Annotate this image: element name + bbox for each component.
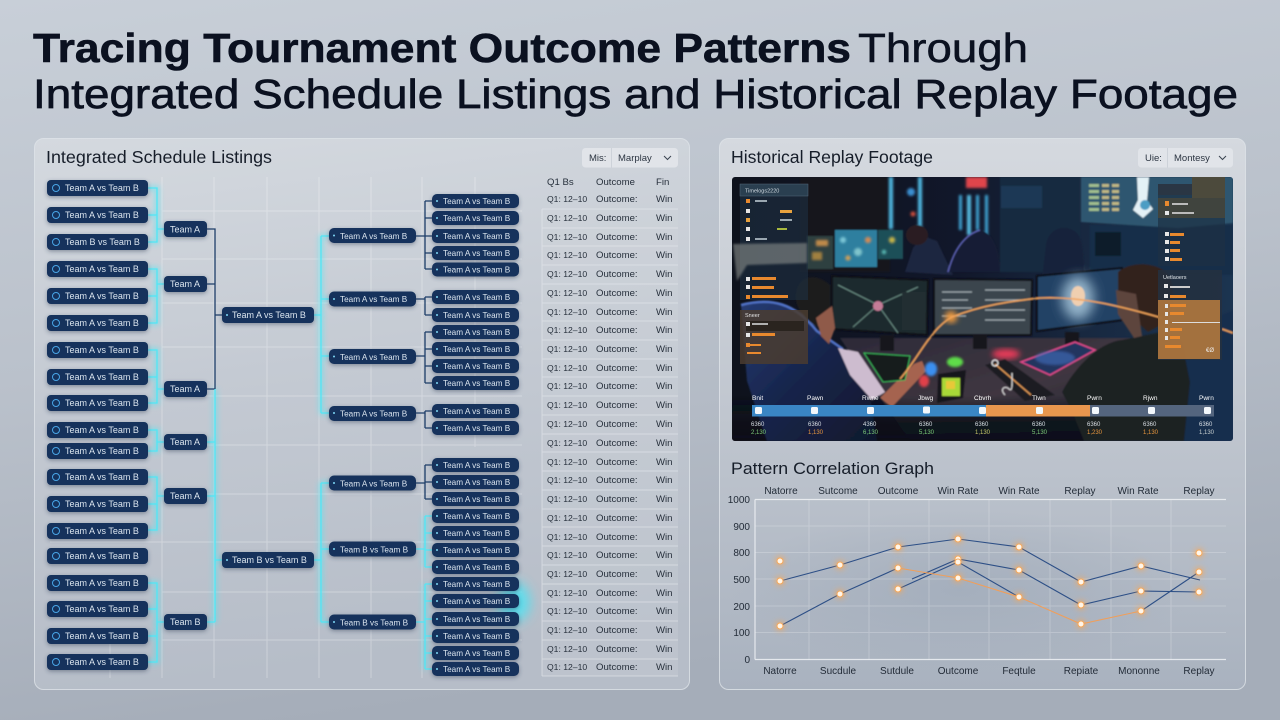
results table: Win [656,344,673,355]
bracket round 1: match list: Team A vs Team B [65,264,139,274]
results table: Outcome: [596,194,638,205]
replay timeline: 4360 [863,422,877,428]
replay timeline: Bnit [752,395,763,402]
main monitors [832,268,1122,352]
bracket round 5: match list: Team A vs Team B [443,362,511,371]
bracket round 3: semifinal matches [222,307,314,568]
results table: Q1: 12–10 [547,644,587,654]
results table: Outcome: [596,325,638,336]
results table: Win [656,381,673,392]
results table: Q1: 12–10 [547,625,587,635]
bracket round 1: match list: Team A vs Team B [65,318,139,328]
bracket round 4: quarterfinal matches: Team A vs Team B [340,232,408,241]
results table: Win [656,457,673,468]
results table: Win [656,400,673,411]
background people and chairs [905,225,1121,280]
replay timeline: 5,130 [1032,430,1048,436]
bracket round 1: match list: Team A vs Team B [65,291,139,301]
results table: Outcome: [596,250,638,261]
results table: Q1: 12–10 [547,475,587,485]
bracket round 5: match list: Team A vs Team B [443,615,511,624]
results table: Outcome: [596,381,638,392]
bracket round 4: quarterfinal matches: Team A vs Team B [340,410,408,418]
bracket round 5: match list: Team A vs Team B [443,495,511,504]
replay timeline: Pawn [807,395,824,402]
results table: Win [656,588,673,599]
replay timeline: 1,130 [808,430,824,436]
desk [840,337,1130,418]
bracket round 3: semifinal matches: Team B vs Team B [232,555,307,565]
orange trajectory lines [900,298,1233,395]
screen reflection strip [733,243,807,281]
dropdown control: Montesy [1174,153,1210,164]
results table: Win [656,606,673,617]
replay timeline: Tlwn [1032,395,1046,402]
background room [800,177,1156,272]
bracket round 5: match list: Team A vs Team B [443,345,511,354]
top axis labels [764,486,1215,497]
results table: Q1: 12–10 [547,194,587,204]
results table: Q1: 12–10 [547,438,587,448]
overlay panel lower left: Sneer [745,313,760,319]
highlight glow [498,582,530,622]
bracket round 5: match list: Team A vs Team B [443,266,511,274]
results table: Q1: 12–10 [547,363,587,373]
results table: Outcome: [596,232,638,243]
results table: Outcome: [596,625,638,636]
replay timeline: 6360 [919,422,933,428]
title: Tracing Tournament Outcome Patterns [33,25,851,71]
results table: Outcome: [596,569,638,580]
keyboards [864,342,1095,382]
bracket round 4: quarterfinal matches [329,228,416,630]
y axis labels: 1000 [728,495,750,506]
bracket connectors [147,188,432,669]
bracket round 5: match list: Team A vs Team B [443,580,511,589]
bracket round 1: match list: Team A vs Team B [65,372,139,382]
bracket round 2: team winners: Team B [170,617,201,627]
results table: Win [656,532,673,543]
results table: Outcome: [596,662,638,673]
bottom axis labels [763,666,1215,677]
results table: Win [656,269,673,280]
results table: Win [656,250,673,261]
bracket round 1: match list: Team A vs Team B [65,398,139,408]
bracket round 1: match list: Team A vs Team B [65,526,139,536]
dropdown control: Uie: [1145,153,1162,164]
results table: Win [656,569,673,580]
desk devices [919,349,1055,403]
results table: Q1: 12–10 [547,513,587,523]
y axis labels [728,495,750,666]
results table: Q1: 12–10 [547,400,587,410]
bracket round 5: match list: Team A vs Team B [443,529,511,538]
results table: Outcome [596,177,635,188]
bracket round 4: quarterfinal matches: Team B vs Team B [340,546,409,554]
results table: Q1: 12–10 [547,307,587,317]
bracket round 5: match list: Team A vs Team B [443,597,511,606]
results table: Q1: 12–10 [547,325,587,335]
bracket round 5: match list: Team A vs Team B [443,546,511,555]
bottom axis labels: Natorre [763,666,797,677]
title: Through [858,25,1028,71]
bracket round 1: match list: Team A vs Team B [65,499,139,509]
replay timeline: 6360 [1032,422,1046,428]
panel: integrated schedule listings [34,138,690,690]
bracket round 4: quarterfinal matches: Team A vs Team B [340,480,408,488]
results table: Outcome: [596,213,638,224]
results table: Q1: 12–10 [547,269,587,279]
replay footage scene [732,177,1233,441]
dropdown control: Marplay [618,153,652,164]
results table: Win [656,419,673,430]
replay timeline: 1,130 [1199,430,1215,436]
line chart: pattern correlation [728,486,1226,677]
results table: Outcome: [596,419,638,430]
title [33,25,1238,117]
replay timeline: 1,230 [1087,430,1103,436]
data lines [780,539,1200,626]
y axis labels: 100 [733,628,750,639]
replay timeline: Pwrn [1087,395,1102,402]
results table: Outcome: [596,606,638,617]
top axis labels: Replay [1064,486,1096,497]
wall screen [1081,177,1233,228]
y axis labels: 800 [733,548,750,559]
results table: Q1: 12–10 [547,419,587,429]
top axis labels: Sutcome [818,486,858,497]
results table: Q1: 12–10 [547,250,587,260]
results table: Win [656,325,673,336]
bottom axis labels: Sucdule [820,666,857,677]
results table: Q1: 12–10 [547,213,587,223]
results table: Outcome: [596,288,638,299]
bottom axis labels: Repiate [1064,666,1099,677]
panel: historical replay footage and graph [720,138,1246,690]
results table: Q1: 12–10 [547,532,587,542]
bracket round 5: match list: Team A vs Team B [443,632,511,641]
results table: Win [656,213,673,224]
results table: Outcome: [596,513,638,524]
replay timeline [751,395,1215,436]
y axis labels: 900 [733,522,750,533]
overlay panel top left [740,184,808,300]
results table: Outcome: [596,588,638,599]
results table: Fin [656,177,669,188]
results table: Outcome: [596,307,638,318]
title: Integrated Schedule Listings and Historical Replay Footage [33,71,1238,117]
bottom axis labels: Outcome [938,666,979,677]
bracket round 5: match list: Team A vs Team B [443,407,511,416]
dropdown control [1138,148,1233,168]
results table: Q1: 12–10 [547,457,587,467]
bracket round 5: match list: Team A vs Team B [443,478,511,487]
left player [741,277,926,441]
replay timeline: 6360 [975,422,989,428]
bracket round 1: match list [47,180,148,670]
results table: Q1: 12–10 [547,569,587,579]
results table: Q1 Bs [547,177,574,188]
replay timeline: Rwne [862,395,879,402]
results table: Outcome: [596,269,638,280]
bracket round 5: match list: Team A vs Team B [443,293,511,302]
overlay panel lower left [740,310,808,364]
bracket round 1: match list: Team A vs Team B [65,345,139,355]
bracket round 5: match list: Team A vs Team B [443,328,511,337]
results table [542,177,678,676]
bracket round 2: team winners: Team A [170,491,200,501]
replay timeline: Jbwg [918,395,934,402]
top axis labels: Win Rate [1117,486,1159,497]
dropdown control [582,148,678,168]
results table: Q1: 12–10 [547,344,587,354]
results table: Outcome: [596,475,638,486]
top axis labels: Win Rate [998,486,1040,497]
bracket round 1: match list: Team A vs Team B [65,472,139,482]
bracket round 1: match list: Team A vs Team B [65,446,139,456]
right player [1062,264,1233,441]
bracket round 2: team winners: Team A [170,384,200,394]
replay timeline: 6360 [1143,422,1157,428]
bottom axis labels: Replay [1183,666,1215,677]
bottom axis labels: Mononne [1118,666,1160,677]
results table: Win [656,288,673,299]
top axis labels: Replay [1183,486,1215,497]
bottom axis labels: Sutdule [880,666,914,677]
results table: Outcome: [596,644,638,655]
bracket round 2: team winners: Team A [170,437,200,447]
replay timeline: 6360 [1199,422,1213,428]
replay timeline: 5,130 [919,430,935,436]
bracket round 1: match list: Team A vs Team B [65,657,139,667]
results table: Outcome: [596,494,638,505]
overlay panel top right [1158,177,1225,266]
replay timeline: Pwrn [1199,395,1214,402]
replay timeline: 6,130 [863,430,879,436]
results table: Win [656,475,673,486]
y axis labels: 500 [733,575,750,586]
bracket round 5: match list: Team A vs Team B [443,214,511,223]
bracket round 1: match list: Team A vs Team B [65,425,139,435]
heading: integrated schedule listings: Integrated Schedule Listings [46,147,272,167]
y axis labels: 0 [744,655,750,666]
bracket round 1: match list: Team A vs Team B [65,551,139,561]
bracket round 5: match list: Team A vs Team B [443,649,511,658]
results table: Win [656,363,673,374]
replay timeline: 2,130 [751,430,767,436]
results table: Win [656,662,673,673]
bracket round 4: quarterfinal matches: Team B vs Team B [340,618,409,628]
top axis labels: Win Rate [937,486,979,497]
results table: Outcome: [596,363,638,374]
bracket round 1: match list: Team A vs Team B [65,604,139,614]
bracket round 5: match list: Team A vs Team B [443,665,511,674]
bracket round 2: team winners: Team A [170,279,200,289]
bracket round 5: match list: Team A vs Team B [443,249,511,258]
results table: Outcome: [596,438,638,449]
results table: Outcome: [596,457,638,468]
results table: Outcome: [596,344,638,355]
bracket round 2: team winners [164,221,207,630]
results table: Q1: 12–10 [547,550,587,560]
background monitors [807,230,903,269]
bracket round 5: match list: Team A vs Team B [443,563,511,572]
data points [777,536,1202,629]
overlay panel lower right: Uetlaoers [1163,275,1187,281]
top axis labels: Outcome [878,486,919,497]
bracket round 4: quarterfinal matches: Team A vs Team B [340,295,408,304]
results table: Q1: 12–10 [547,381,587,391]
replay timeline: Rjwn [1143,395,1158,402]
results table: Q1: 12–10 [547,288,587,298]
dropdown control: Mis: [589,153,606,164]
top axis labels: Natorre [764,486,798,497]
bracket round 5: match list: Team A vs Team B [443,424,511,433]
bracket round 5: match list: Team A vs Team B [443,512,511,521]
results table: Outcome: [596,550,638,561]
bracket round 5: match list: Team A vs Team B [443,197,511,206]
results table: Q1: 12–10 [547,494,587,504]
replay timeline: Cbvrh [974,395,992,402]
replay timeline: 6360 [808,422,822,428]
data point glows [775,534,1204,631]
results table: Q1: 12–10 [547,588,587,598]
results table: Win [656,307,673,318]
overlay panel lower right [1158,270,1222,360]
results table: Q1: 12–10 [547,232,587,242]
bracket round 5: match list: Team A vs Team B [443,461,511,470]
bracket round 1: match list: Team A vs Team B [65,183,139,193]
bracket round 1: match list: Team B vs Team B [65,237,140,247]
overlay panel lower right: €Ø [1206,348,1214,354]
results table: Outcome: [596,400,638,411]
replay timeline: 6360 [1087,422,1101,428]
bracket round 1: match list: Team A vs Team B [65,210,139,220]
bracket round 5: match list [432,194,519,676]
bracket round 1: match list: Team A vs Team B [65,631,139,641]
heading: historical replay footage: Historical Replay Footage [731,147,933,167]
results table: Win [656,644,673,655]
bracket round 2: team winners: Team A [170,224,200,234]
results table: Win [656,194,673,205]
heading: pattern correlation graph: Pattern Correlation Graph [731,459,934,478]
results table: Win [656,625,673,636]
results table: Q1: 12–10 [547,662,587,672]
bracket round 3: semifinal matches: Team A vs Team B [232,310,306,320]
results table: Win [656,494,673,505]
bottom axis labels: Feqtule [1002,666,1036,677]
results table: Q1: 12–10 [547,606,587,616]
results table: Win [656,550,673,561]
results table: Win [656,513,673,524]
bracket round 5: match list: Team A vs Team B [443,232,511,241]
replay timeline: 1,130 [975,430,991,436]
replay timeline: 1,130 [1143,430,1159,436]
results table: Win [656,438,673,449]
y axis labels: 200 [733,602,750,613]
overlay panel top left: Timelogs2220 [745,188,779,194]
bracket round 1: match list: Team A vs Team B [65,578,139,588]
bracket round 4: quarterfinal matches: Team A vs Team B [340,353,408,362]
replay timeline: 6360 [751,422,765,428]
bracket round 5: match list: Team A vs Team B [443,379,511,388]
results table: Outcome: [596,532,638,543]
bracket round 5: match list: Team A vs Team B [443,311,511,320]
results table: Win [656,232,673,243]
